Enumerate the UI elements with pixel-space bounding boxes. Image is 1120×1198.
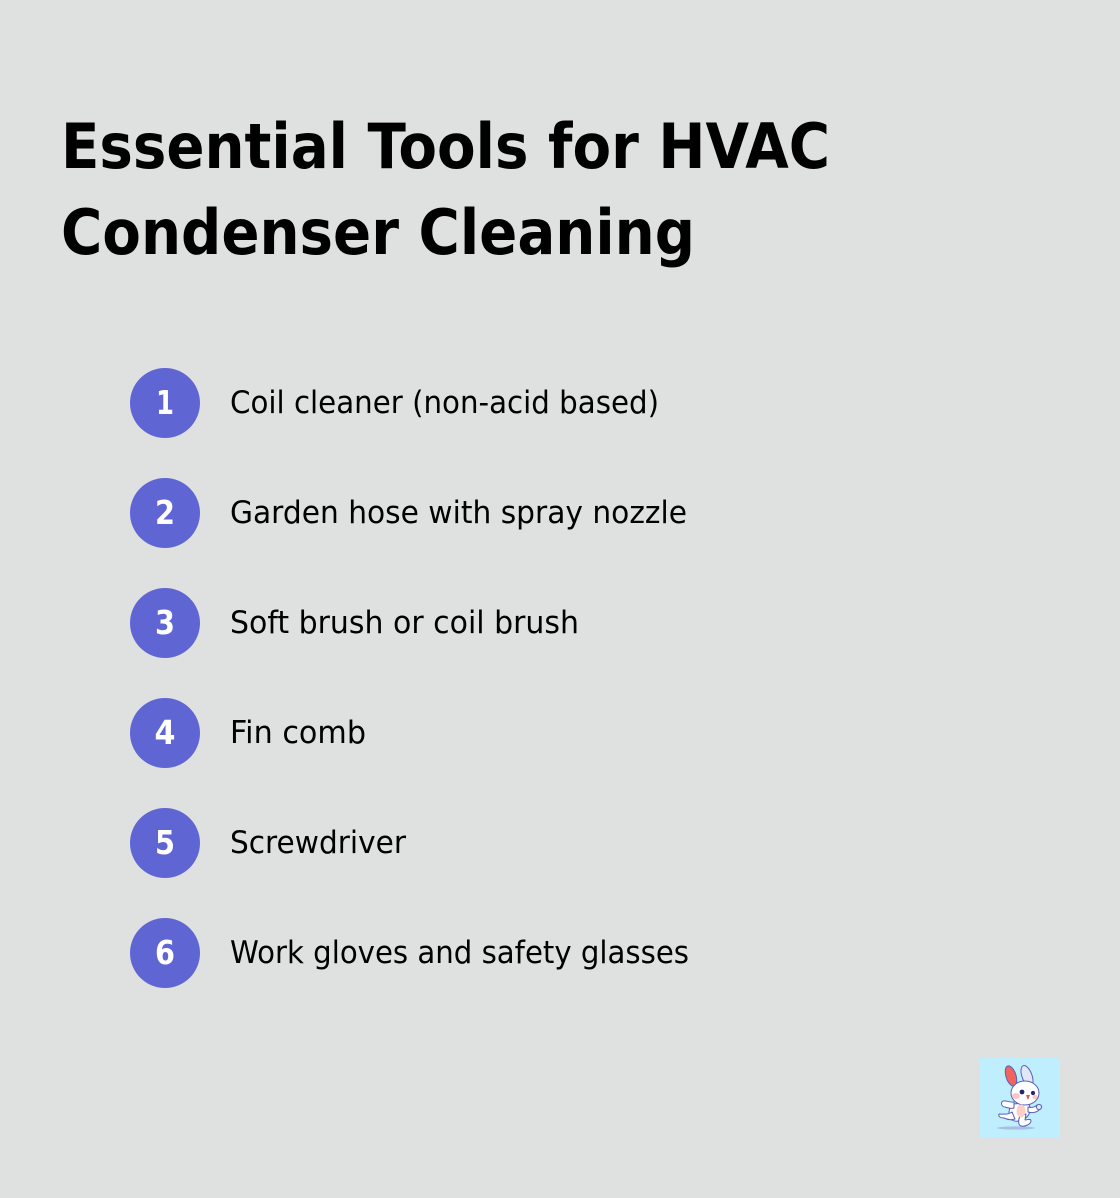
list item 3: Soft brush or coil brush xyxy=(230,605,579,641)
list item 5: Screwdriver xyxy=(230,825,406,861)
list item 2: 2 xyxy=(155,493,175,532)
list item 6: Work gloves and safety glasses xyxy=(230,935,689,971)
list item 4 xyxy=(130,698,366,768)
title xyxy=(61,110,830,269)
list item 1 xyxy=(130,368,659,438)
title: Essential Tools for HVAC xyxy=(61,110,830,183)
list item 4: 4 xyxy=(154,713,176,752)
list item 4: Fin comb xyxy=(230,715,366,751)
list item 6: 6 xyxy=(155,933,175,972)
icon: rabbit logo xyxy=(980,1058,1060,1138)
title: Condenser Cleaning xyxy=(61,196,695,269)
list item 5: 5 xyxy=(155,823,175,862)
list item 3: 3 xyxy=(155,603,175,642)
list item 1: 1 xyxy=(156,383,174,422)
list item 2: Garden hose with spray nozzle xyxy=(230,495,687,531)
list item 5 xyxy=(130,808,406,878)
list item 6 xyxy=(130,918,689,988)
list item 2 xyxy=(130,478,687,548)
list item 3 xyxy=(130,588,579,658)
list item 1: Coil cleaner (non-acid based) xyxy=(230,385,659,421)
